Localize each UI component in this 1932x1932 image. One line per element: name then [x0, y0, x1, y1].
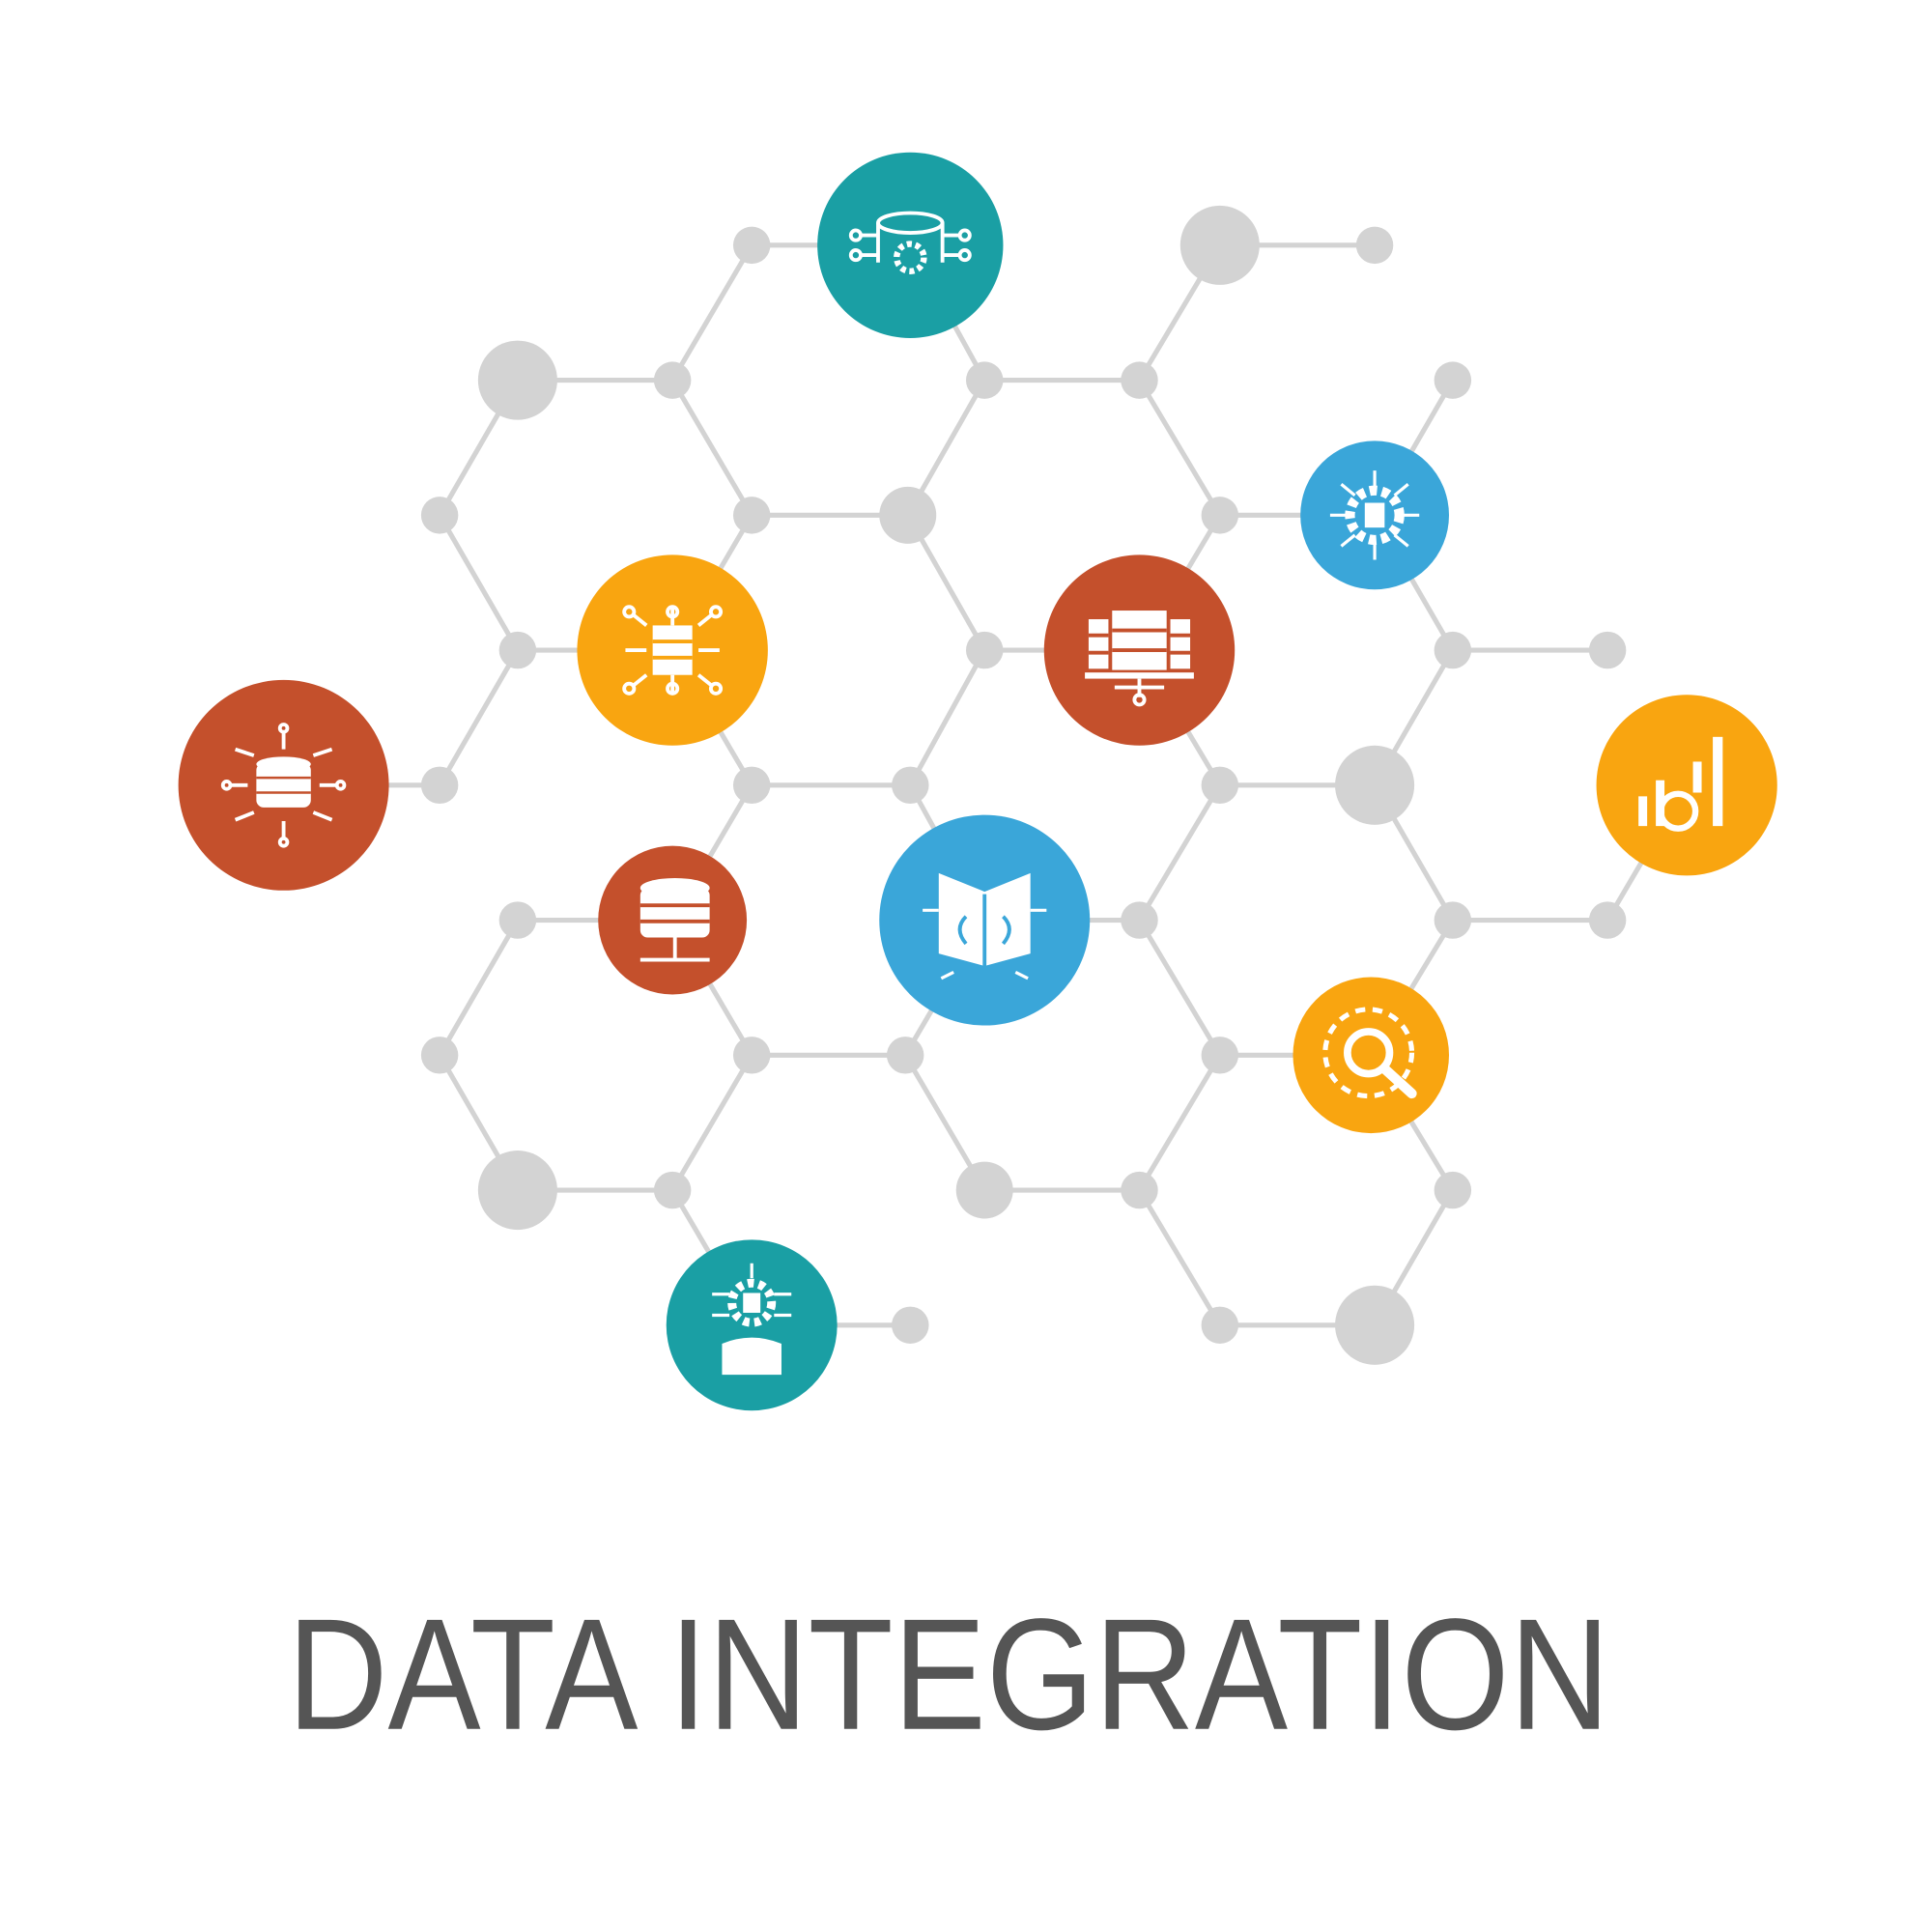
icon: gear network (blue small) — [1300, 440, 1449, 589]
icon: bar chart (orange right) — [1597, 695, 1777, 875]
icon: gear server platform (teal bottom) — [667, 1239, 838, 1410]
icon: magnifier search (orange lower) — [1293, 978, 1449, 1133]
icon: database gear (teal top) — [817, 153, 1003, 338]
network nodes — [421, 206, 1626, 1365]
icon: data inflow (red left) — [179, 680, 389, 891]
icon: server network (orange) — [577, 554, 768, 746]
icon: brain book (blue large) — [879, 815, 1090, 1026]
icon: database network (red small) — [598, 846, 747, 994]
network lines — [284, 245, 1687, 1325]
icon: server rack (red center-right) — [1044, 554, 1235, 746]
title: DATA INTEGRATION — [287, 1585, 1610, 1763]
